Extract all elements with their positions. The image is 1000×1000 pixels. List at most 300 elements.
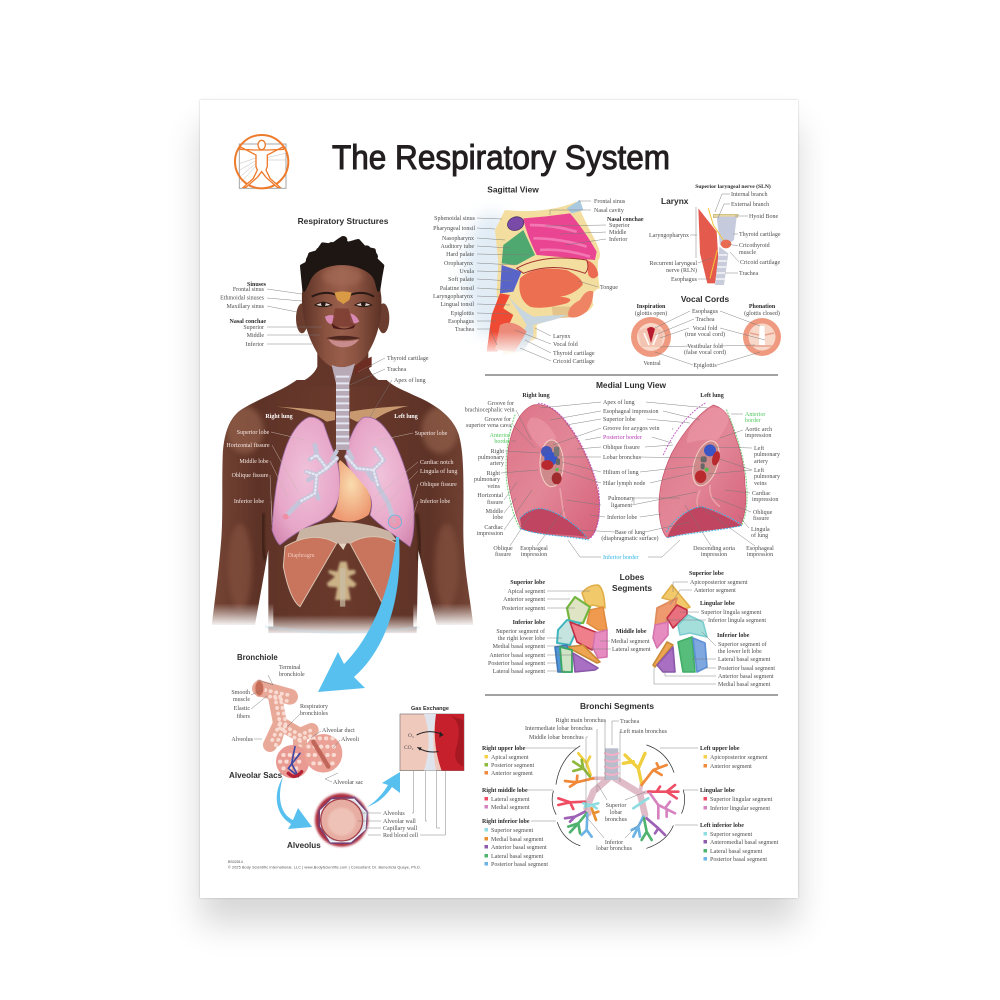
labels: sagittal left: Esophagus: [448, 319, 475, 325]
labels: gas symbols: [404, 733, 414, 751]
legend: right middle lobe: [482, 788, 553, 811]
legend: left inferior lobe: Posterior basal segment: [710, 857, 767, 863]
nasopharynx: [502, 230, 535, 265]
labels: sinuses and nasal conchae: Sinuses: [247, 282, 267, 288]
lungs: [272, 417, 414, 547]
labels: larynx: Hyoid Bone: [749, 214, 779, 220]
legend: lingular lobe: Superior lingular segment: [710, 797, 773, 803]
trachea: [715, 247, 728, 285]
labels: bronchiole section: Alveolar duct: [322, 728, 355, 734]
arrow: lung to bronchiole: [318, 537, 400, 692]
labels: medial right lung left column: lobe: [493, 515, 503, 521]
lung highlight circle: [283, 514, 402, 528]
labels: sagittal left: Nasopharynx: [442, 236, 474, 242]
legend: right inferior lobe: Superior segment: [491, 828, 533, 834]
labels: sagittal left: Palatine tonsil: [440, 286, 474, 292]
labels: chest: Oblique fissure: [420, 481, 457, 488]
labels: bronchi centre: Superior: [606, 803, 626, 809]
legend: left upper lobe: Anterior segment: [710, 764, 752, 770]
labels: larynx: nerve (RLN): [666, 267, 697, 274]
labels: medial right lung left column: Right: [491, 449, 504, 455]
oropharynx: [500, 265, 522, 293]
labels: bronchiole section: bronchioles: [300, 711, 329, 717]
medial basal: [573, 653, 598, 672]
labels: right lobes: Anterior segment: [503, 597, 545, 603]
cricothyroid muscle: [721, 240, 731, 248]
labels: middle lobe: Middle lobe: [616, 629, 647, 635]
labels: larynx: muscle: [739, 250, 756, 256]
labels: alveolus layers: [358, 771, 446, 839]
labels: medial left lung right column: veins: [754, 481, 767, 487]
labels: vocal cords: Vestibular fold: [687, 343, 723, 350]
arrow: sacs to alveolus: [277, 777, 312, 829]
labels: larynx: Trachea: [739, 271, 758, 277]
lateral middle segment: [593, 630, 607, 658]
background fade: [463, 212, 520, 338]
heading: medial lung view: Medial Lung View: [596, 380, 667, 390]
superior lower: [678, 615, 707, 637]
labels: medial center column: [540, 399, 708, 561]
legend: right middle lobe: Right middle lobe: [482, 788, 528, 794]
labels: larynx: Internal branch: [731, 192, 767, 198]
labels: medial left lung right column: Left: [754, 467, 764, 474]
labels: sagittal left: Trachea: [455, 327, 474, 333]
labels: left lobes: Superior segment of: [718, 641, 767, 648]
legend: left inferior lobe: Anteromedial basal segment: [710, 840, 779, 846]
labels: bronchiole section: Smooth: [231, 690, 250, 696]
labels: medial left lung right column: impression: [701, 552, 727, 558]
labels: sagittal right: Vocal fold: [553, 341, 578, 348]
labels: left lobes: Anterior segment: [694, 588, 736, 594]
anterior basal: [657, 647, 675, 672]
divider: [485, 694, 778, 696]
labels: sagittal left: Hard palate: [446, 252, 474, 258]
tongue: [519, 269, 583, 308]
labels: sinuses and nasal conchae: Middle: [247, 333, 264, 339]
anterior: [655, 598, 677, 625]
labels: vocal cords: (glottis open): [635, 310, 667, 317]
cream bone and skin: [495, 200, 600, 355]
labels: larynx: Cricothyroid: [739, 243, 770, 249]
labels: larynx: [649, 183, 781, 283]
hair: [302, 236, 383, 290]
labels: alveolus layers: Red blood cell: [383, 833, 418, 839]
labels: medial center column: (diaphragmatic surface): [601, 535, 659, 542]
labels: medial left lung right column: impression: [747, 552, 773, 558]
labels: medial right lung left column: fissure: [487, 499, 503, 506]
labels: right lobes: Superior segment of: [496, 628, 545, 635]
medial middle segment: [570, 622, 598, 650]
neck: [298, 347, 385, 387]
labels: medial right lung left column: Groove for: [488, 400, 514, 407]
legend: right upper lobe: Posterior segment: [491, 763, 534, 769]
illustration: head and neck: [296, 236, 389, 387]
labels: bronchi top: [525, 718, 668, 810]
heading: vocal cords: Vocal Cords: [681, 294, 729, 304]
labels: chest: Right lung: [265, 414, 293, 420]
labels: right lobes: Posterior segment: [502, 606, 545, 612]
labels: chest: Inferior lobe: [420, 498, 450, 505]
labels: bronchi top: Right main bronchus: [556, 718, 607, 724]
labels: sagittal left: Uvula: [459, 269, 474, 275]
border outlines: [506, 403, 600, 540]
labels: medial left lung right column: of lung: [751, 532, 768, 539]
superior lower segment: [557, 620, 580, 645]
labels: medial right lung left column: impression: [477, 531, 503, 537]
labels: sagittal left: Oropharynx: [444, 261, 473, 267]
labels: chest: Oblique fissure: [232, 472, 269, 479]
labels: sagittal right: Nasal conchae: [607, 217, 644, 223]
bronchial trees: [286, 445, 394, 522]
labels: bronchiole section: Respiratory: [300, 704, 328, 710]
labels: alveolus layers: Alveolar wall: [383, 819, 416, 825]
footer credits: BS02514: [228, 860, 243, 864]
labels: medial center column: Lobar bronchus: [603, 455, 641, 461]
anterior basal: [567, 645, 600, 663]
labels: medial right lung left column: brachiocephalic vein: [465, 408, 514, 414]
labels: medial center column: Inferior lobe: [607, 514, 637, 521]
labels: sagittal left: [433, 216, 530, 345]
legend: right inferior lobe: Right inferior lobe: [482, 819, 530, 825]
labels: gas symbols: CO₂: [404, 745, 414, 751]
illustration: torso with lungs: [212, 380, 473, 634]
labels: left lobes: Posterior basal segment: [718, 666, 775, 672]
legend: left inferior lobe: Lateral basal segment: [710, 849, 763, 855]
legend: lingular lobe: [683, 788, 773, 812]
hard palate: [517, 258, 588, 273]
labels: medial right lung left column: Horizontal: [477, 493, 503, 499]
bronchiole tree: [260, 688, 312, 748]
labels: sagittal right: Nasal cavity: [594, 208, 624, 214]
labels: sagittal right: Inferior: [609, 236, 627, 243]
labels: left lobes: Lateral basal segment: [718, 657, 771, 663]
labels: medial right lung left column: pulmonary: [478, 455, 504, 461]
labels: medial center column: Groove for azygos vein: [603, 425, 659, 432]
labels: left lobes: Medial basal segment: [718, 682, 771, 688]
labels: medial left lung right column: Lingula: [751, 527, 770, 533]
divider: [485, 374, 778, 376]
labels: vocal cords: Ventral: [643, 361, 661, 367]
labels: bronchi centre: Inferior: [605, 839, 623, 846]
labels: medial left lung right column: impression: [752, 497, 778, 503]
labels: middle lobe: Medial segment: [611, 639, 650, 645]
labels: right lobes: Lateral basal segment: [493, 669, 545, 675]
heading: sagittal view: Sagittal View: [487, 184, 539, 194]
heading: lobes segments: Segments: [612, 583, 652, 593]
labels: bronchiole section: Bronchiole: [237, 653, 278, 662]
left tree branches: [623, 753, 678, 840]
border outlines: [663, 403, 747, 538]
labels: right lobes: the right lower lobe: [498, 636, 545, 642]
labels: sagittal right: Cricoid Cartilage: [553, 359, 595, 365]
labels: sagittal left: Lingual tonsil: [440, 302, 474, 308]
labels: bronchiole section: Alveolus: [231, 737, 254, 743]
ears and face: [296, 263, 389, 369]
labels: medial left lung right column: Esophageal: [746, 546, 774, 552]
labels: sinuses and nasal conchae: Superior: [243, 325, 264, 331]
labels: vocal cords: [635, 304, 780, 369]
labels: medial center column: Superior lobe: [603, 417, 636, 423]
labels: vocal cords: Inspiration: [637, 304, 666, 310]
labels: sagittal left: Epiglottis: [451, 311, 475, 317]
labels: left lobes: Superior lobe: [689, 571, 724, 577]
legend: right middle lobe: Medial segment: [491, 805, 530, 811]
labels: bronchiole section: Elastic: [234, 706, 250, 712]
nerves: [708, 208, 723, 278]
labels: right lobes: Superior lobe: [510, 580, 545, 586]
legend: left inferior lobe: Left inferior lobe: [700, 823, 744, 829]
labels: bronchi top: Middle lobar bronchus: [529, 735, 584, 741]
labels: chest: Horizontal fissure: [226, 442, 270, 449]
labels: left lobes: the lower left lobe: [718, 648, 762, 655]
legend: left upper lobe: Left upper lobe: [700, 746, 740, 752]
labels: vocal cords: Trachea: [695, 317, 715, 323]
footer credits: [228, 860, 421, 870]
labels: right lobes: Anterior basal segment: [489, 653, 545, 659]
labels: medial right lung left column: Cardiac: [484, 525, 503, 531]
labels: medial center column: Base of lung: [615, 529, 645, 536]
posterior basal: [693, 638, 707, 672]
labels: neck: Trachea: [387, 367, 406, 373]
labels: sagittal left: Soft palate: [448, 276, 474, 283]
labels: bronchi centre: lobar: [610, 810, 622, 816]
apical segment: [582, 585, 605, 608]
sphenoid sinus: [506, 215, 526, 233]
collar bones: [277, 406, 408, 422]
diaphragm: [283, 522, 397, 607]
labels: vocal cords: (false vocal cord): [684, 349, 726, 356]
labels: medial center column: Esophageal impression: [603, 409, 658, 415]
labels: bronchi centre: bronchus: [605, 817, 628, 823]
heading: bronchi segments: Bronchi Segments: [580, 701, 654, 711]
outer arcs: [552, 745, 685, 848]
labels: bronchiole section: Alveolar sac: [333, 780, 363, 786]
labels: left lobes: Lingular lobe: [700, 601, 735, 607]
icon: vitruvian logo: [235, 135, 288, 188]
illustration: trachea: [332, 363, 355, 460]
labels: medial right lung left column: superior vena cava: [466, 423, 511, 429]
labels: sagittal right: Frontal sinus: [594, 199, 626, 205]
labels: bronchi top: Left main bronchus: [620, 728, 668, 735]
legend: right upper lobe: [482, 746, 578, 777]
icon: vocal cords phonation: [743, 318, 781, 356]
labels: medial right lung left column: Anterior: [490, 433, 510, 439]
labels: bronchiole section: muscle: [233, 697, 250, 703]
illustration: medial right lung: [506, 403, 600, 540]
bronchiole bubbles: [265, 690, 313, 748]
labels: medial left lung right column: Left: [754, 445, 764, 452]
labels: medial left lung right column: Anterior: [745, 412, 765, 418]
legend: lingular lobe: Inferior lingular segment: [710, 805, 770, 812]
labels: left lobes: Inferior lingula segment: [708, 617, 766, 624]
labels: medial center column: ligament: [611, 503, 632, 509]
labels: sagittal right: Larynx: [553, 334, 570, 340]
right tree branches: [558, 753, 598, 837]
legend: right upper lobe: Anterior segment: [491, 771, 533, 777]
illustration: bronchial tree: [552, 745, 685, 848]
labels: chest: [226, 414, 457, 559]
labels: medial left lung right column: fissure: [753, 515, 769, 522]
labels: sagittal left: Auditory tube: [440, 244, 474, 250]
bronchi trunk: [587, 778, 650, 815]
labels: vocal cords: Epiglottis: [693, 363, 717, 369]
illustration: medial left lung: [659, 403, 747, 538]
labels: medial left lung right column: Descending aorta: [693, 546, 735, 552]
labels: medial right lung left column: pulmonary: [474, 477, 500, 483]
labels: medial center column: Oblique fissure: [603, 444, 640, 451]
legend: right inferior lobe: Posterior basal segment: [491, 862, 548, 868]
labels: medial right lung left column: Groove for: [484, 416, 511, 423]
bronchiole opening: [255, 680, 264, 696]
labels: medial left lung right column: Aortic arch: [745, 427, 772, 433]
labels: chest: Superior lobe: [415, 431, 448, 437]
inferior lingula: [653, 622, 668, 648]
heading: larynx: Larynx: [661, 196, 689, 206]
legend: right inferior lobe: [482, 819, 556, 868]
heading: right lung: Right lung: [522, 393, 550, 399]
spine: [327, 562, 357, 607]
labels: sinuses and nasal conchae: Nasal conchae: [230, 319, 266, 325]
labels: medial left lung right column: Cardiac: [752, 491, 771, 497]
labels: medial left lung right column: impression: [745, 433, 771, 439]
illustration: larynx: [698, 208, 738, 285]
labels: sagittal left: Laryngopharynx: [433, 294, 473, 300]
heading: lobes segments: Lobes: [620, 572, 645, 582]
heart: [332, 460, 371, 521]
labels: sinuses and nasal conchae: Ethmoidal sinuses: [220, 296, 265, 302]
labels: medial center column: Posterior border: [603, 435, 642, 441]
legend: left inferior lobe: Superior segment: [710, 832, 752, 838]
labels: medial left lung right column: [685, 412, 780, 558]
title: The Respiratory System: [332, 139, 670, 177]
legend: right inferior lobe: Lateral basal segment: [491, 854, 544, 860]
labels: larynx: Recurrent laryngeal: [650, 261, 697, 267]
labels: bronchi top: Intermediate lobar bronchus: [525, 726, 593, 732]
labels: vocal cords: (glottis closed): [744, 310, 780, 317]
labels: medial right lung left column: [465, 400, 565, 558]
labels: medial left lung right column: Oblique: [753, 510, 773, 516]
labels: right lobes: Posterior basal segment: [488, 661, 545, 667]
labels: sinuses and nasal conchae: [220, 282, 322, 348]
labels: sagittal right: Middle: [609, 230, 627, 236]
anterior segment: [587, 607, 607, 630]
labels: bronchiole section: Terminal: [279, 665, 301, 671]
labels: sinuses and nasal conchae: Inferior: [246, 341, 264, 348]
labels: chest: Inferior lobe: [234, 498, 264, 505]
legend: left inferior lobe: [675, 823, 779, 863]
labels: chest: Diaphragm: [288, 553, 315, 559]
hyoid bone: [713, 214, 738, 218]
laryngopharynx and esophagus: [487, 293, 513, 352]
labels: neck: Thyroid cartilage: [387, 356, 429, 362]
labels: vocal cords: Phonation: [749, 304, 776, 310]
labels: bronchi top: Trachea: [620, 719, 639, 725]
labels: middle lobe: [590, 629, 651, 653]
labels: alveolus layers: Alveolus: [383, 811, 405, 817]
labels: larynx: Esophagus: [671, 277, 698, 283]
labels: medial center column: Pulmonary: [608, 496, 634, 502]
labels: medial center column: Hilar lymph node: [603, 481, 646, 487]
heading: alveolus: Alveolus: [287, 841, 321, 850]
posterior segment: [567, 597, 590, 623]
labels: sagittal right: [515, 199, 644, 365]
labels: right lobes: Medial basal segment: [493, 644, 545, 650]
heading: respiratory structures: Respiratory Structures: [298, 216, 389, 226]
labels: chest: Lingula of lung: [420, 468, 457, 475]
labels: sagittal right: Tongue: [600, 285, 618, 291]
labels: bronchiole section: bronchiole: [279, 672, 305, 678]
legend: left upper lobe: Apicoposterior segment: [710, 755, 768, 761]
labels: vocal cords: Esophagus: [692, 309, 719, 315]
labels: vocal cords: (true vocal cord): [685, 331, 725, 338]
chart: gas exchange box: [400, 714, 464, 771]
labels: larynx: Laryngopharynx: [649, 233, 689, 239]
alveolar sac right: [304, 734, 342, 773]
labels: chest: Cardiac notch: [420, 460, 454, 466]
labels: left lobes: Apicoposterior segment: [690, 580, 748, 586]
labels: larynx: Superior laryngeal nerve (SLN): [695, 183, 771, 190]
labels: medial left lung right column: border: [745, 418, 761, 424]
heading: left lung: Left lung: [700, 393, 724, 399]
labels: chest: Middle lobe: [239, 459, 269, 465]
labels: gas symbols: O₂: [408, 733, 414, 739]
labels: sagittal right: Superior: [609, 223, 630, 229]
labels: larynx: External branch: [731, 202, 769, 208]
legend: right upper lobe: Apical segment: [491, 755, 529, 761]
labels: right lobes: Apical segment: [508, 589, 545, 595]
labels: neck: Apex of lung: [394, 377, 426, 384]
illustration: sagittal head section: [463, 200, 600, 357]
labels: chest: Superior lobe: [237, 430, 270, 436]
labels: medial right lung left column: Middle: [486, 509, 503, 515]
medial basal: [653, 642, 673, 667]
face features: [312, 291, 374, 347]
labels: medial left lung right column: pulmonary: [754, 474, 780, 480]
labels: medial right lung left column: artery: [490, 461, 504, 467]
labels: medial left lung right column: pulmonary: [754, 452, 780, 458]
alveolar sac left: [276, 745, 309, 778]
labels: larynx: Cricoid cartilage: [740, 260, 780, 266]
arrow: alveolus to gas exchange: [367, 772, 400, 807]
icon: vocal cords inspiration: [631, 317, 671, 357]
labels: medial right lung left column: impression: [521, 552, 547, 558]
lateral basal: [678, 637, 695, 672]
nasal cavity: [523, 213, 597, 260]
thyroid cartilage: [717, 217, 737, 245]
labels: sagittal left: Pharyngeal tonsil: [433, 226, 475, 232]
labels: vocal cords: Vocal fold: [693, 325, 717, 332]
labels: sagittal left: Sphenoidal sinus: [434, 216, 476, 222]
labels: right lobes: [488, 580, 590, 675]
labels: sinuses and nasal conchae: Frontal sinus: [233, 287, 265, 293]
legend: right inferior lobe: Medial basal segment: [491, 837, 544, 843]
labels: neck: [350, 356, 429, 417]
labels: medial center column: Hilium of lung: [603, 469, 639, 476]
footer credits: © 2025 Body Scientific International, LLC | www.BodyScientific.com | Consultant: Dr. Benedicta Quaye, Ph.D.: [228, 866, 421, 870]
lateral basal: [560, 647, 572, 672]
superior lingula: [667, 605, 687, 628]
heading: alveolar sacs: Alveolar Sacs: [229, 771, 283, 780]
labels: middle lobe: Lateral segment: [612, 647, 651, 653]
legend: right inferior lobe: Anterior basal segment: [491, 845, 547, 851]
labels: alveolus layers: Capillary wall: [383, 826, 417, 832]
torso and arms: [212, 380, 473, 634]
apicoposterior: [662, 585, 690, 610]
poster sheet: [200, 100, 798, 898]
labels: bronchi centre: lobar bronchus: [596, 846, 633, 852]
labels: medial right lung left column: Oblique: [493, 546, 513, 552]
labels: bronchi centre: [585, 785, 645, 852]
